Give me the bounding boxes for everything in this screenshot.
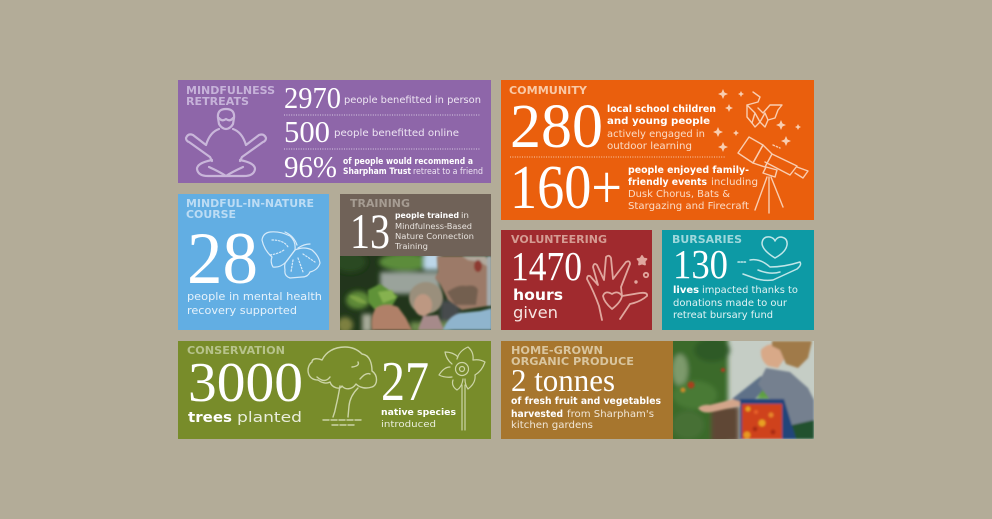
heading: volunteering: VOLUNTEERING	[511, 233, 607, 246]
text: lives impacted	[673, 285, 798, 321]
panel: volunteering	[501, 230, 652, 330]
text: people supported	[187, 290, 322, 317]
photo: man and woman with plant	[340, 256, 491, 330]
text: people trained: Training	[394, 242, 428, 251]
stat: 27 native species: introduced	[381, 420, 436, 430]
stat: 96% recommend	[284, 149, 483, 184]
heading: mindful-in-nature course	[186, 197, 314, 221]
stat: 3000 trees: planted	[237, 410, 302, 426]
stat: 280 school children: 280	[510, 93, 603, 161]
text: people trained	[394, 211, 474, 251]
icon: butterfly	[262, 232, 320, 278]
stat: 2970 in person: 2970	[284, 80, 341, 115]
heading: mindful-in-nature course: COURSE	[186, 208, 236, 221]
icon: hand with heart	[587, 256, 648, 320]
stat: 96% recommend: of people would recommend a	[343, 157, 473, 167]
text: fruit and vegetables: kitchen gardens	[511, 420, 593, 431]
stat: 3000 trees: 3000	[188, 352, 303, 414]
stat: 280 school children: local school children	[607, 104, 716, 115]
panel: bursaries	[662, 230, 814, 330]
stat: 1470 hours: given	[513, 303, 558, 322]
text: lives impacted: retreat bursary fund	[673, 310, 773, 321]
stat: 1470 hours: 1470	[511, 243, 582, 289]
stat: 2970 in person: people benefitted in person	[344, 95, 481, 106]
stat: 500 online: 500	[284, 114, 330, 149]
stat: 96% recommend: retreat to a friend	[413, 167, 483, 177]
stat: 27 native species	[381, 351, 456, 430]
panel: home-grown organic produce	[501, 336, 814, 444]
icon: tree	[308, 347, 376, 425]
stat: 2970 in person	[284, 80, 481, 115]
heading: mindfulness retreats	[186, 84, 275, 108]
stat: 280 school children: actively engaged in	[607, 129, 705, 140]
stat: 160+ events: people enjoyed family-	[628, 165, 749, 176]
heading: mindfulness retreats: RETREATS	[186, 95, 249, 108]
stat: 3000 trees: trees	[188, 410, 232, 426]
stat: 160+ events	[510, 154, 758, 222]
stat: 280 school children	[510, 93, 716, 161]
text: lives impacted: lives	[673, 285, 699, 296]
panel: conservation	[178, 341, 491, 439]
stat: 27 native species: native species	[381, 408, 456, 418]
stat: 280 school children: and young people	[607, 116, 710, 127]
panel: mindful-in-nature course	[178, 194, 329, 330]
panel: community	[501, 80, 814, 222]
stat: 160+ events: 160+	[510, 154, 622, 222]
stat: 1470 hours: hours	[513, 286, 563, 304]
text: people supported: people in mental health	[187, 290, 322, 303]
icon: meditating person	[186, 109, 266, 176]
text: lives impacted: donations made to our	[673, 298, 788, 309]
photo: woman with tomatoes	[673, 341, 814, 439]
stat: 96% recommend: Sharpham Trust	[343, 167, 411, 177]
heading: mindful-in-nature course: MINDFUL-IN-NATURE	[186, 197, 314, 210]
stat: 1470 hours	[511, 243, 582, 322]
panel: mindfulness retreats	[178, 80, 491, 184]
icon: stars, bat and telescope	[713, 89, 808, 213]
icon: heart and open hand	[738, 237, 801, 280]
heading: community: COMMUNITY	[509, 84, 588, 97]
heading: conservation: CONSERVATION	[187, 344, 285, 357]
text: people trained: people trained	[395, 211, 459, 220]
heading: home-grown organic produce	[511, 344, 634, 368]
heading: bursaries: BURSARIES	[672, 233, 742, 246]
text: fruit and vegetables: of fresh fruit and vegetables	[511, 396, 661, 407]
stat: 96% recommend: 96%	[284, 149, 337, 184]
heading: home-grown organic produce: HOME-GROWN	[511, 344, 603, 357]
stat: 28: 28	[187, 218, 258, 300]
stat: 500 online: people benefitted online	[334, 128, 459, 139]
stat: 500 online	[284, 114, 459, 149]
text: people supported: recovery supported	[187, 304, 297, 317]
text: fruit and vegetables: from Sharpham's	[567, 409, 654, 420]
stat: 130: 130	[673, 241, 728, 287]
icon: daffodil	[439, 347, 485, 430]
heading: training: TRAINING	[350, 197, 410, 210]
stat: 280 school children: outdoor learning	[607, 141, 692, 152]
stat: 160+ events: Dusk Chorus, Bats &	[628, 189, 731, 200]
heading: mindfulness retreats: MINDFULNESS	[186, 84, 275, 97]
text: lives impacted: impacted thanks to	[702, 285, 798, 296]
stat: 13: 13	[350, 203, 390, 259]
stat: 160+ events: Stargazing and Firecraft	[628, 201, 749, 212]
text: people trained: Nature Connection	[395, 232, 474, 241]
heading: home-grown organic produce: ORGANIC PRODUCE	[511, 355, 634, 368]
stat: 2 tonnes: 2 tonnes	[511, 362, 615, 398]
stat: 27 native species: 27	[381, 351, 429, 413]
stat: 160+ events: friendly events	[628, 177, 707, 188]
text: fruit and vegetables	[511, 396, 661, 431]
panel: training	[334, 194, 492, 333]
text: people trained: Mindfulness-Based	[395, 222, 472, 231]
stat: 160+ events: including	[711, 177, 758, 188]
text: people trained: in	[461, 211, 469, 220]
text: fruit and vegetables: harvested	[511, 409, 563, 420]
